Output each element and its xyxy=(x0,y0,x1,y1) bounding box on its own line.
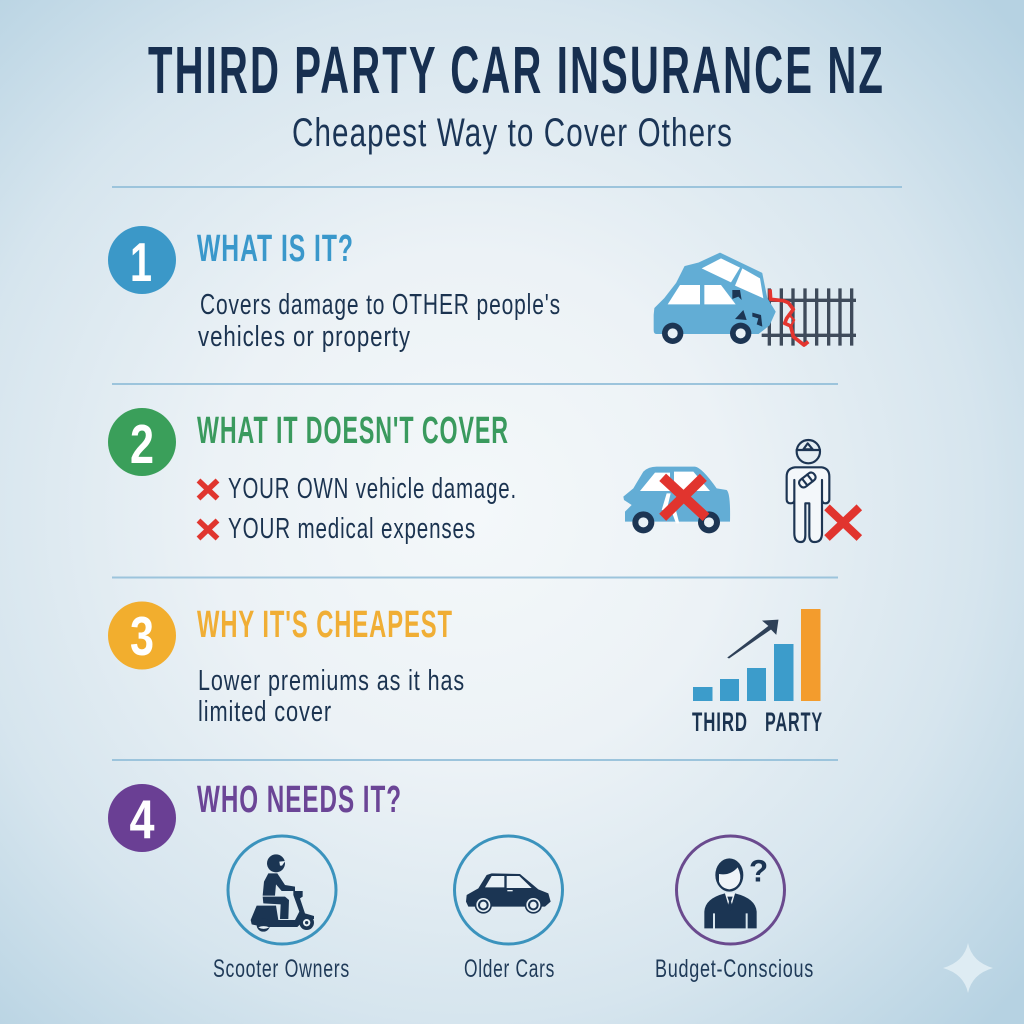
number badge 4 xyxy=(108,784,176,852)
text block: what is it xyxy=(198,289,561,353)
text block: what is it: Covers damage to OTHER people's xyxy=(200,289,561,321)
text block: why it's cheapest xyxy=(198,665,465,728)
list item: medical expenses xyxy=(198,513,476,545)
number badge 3: 3 xyxy=(130,605,154,667)
label: Older Cars xyxy=(464,955,555,983)
list item: own vehicle damage: YOUR OWN vehicle damage. xyxy=(228,473,517,505)
icon: sparkle watermark xyxy=(943,943,993,993)
panel: who needs it xyxy=(108,779,814,983)
text block: why it's cheapest: limited cover xyxy=(198,696,332,728)
icon: scooter owner xyxy=(213,836,350,983)
label: Scooter Owners xyxy=(213,955,350,983)
number badge 2: 2 xyxy=(130,413,154,475)
chart label: PARTY xyxy=(765,707,823,737)
number badge 1: 1 xyxy=(130,231,152,293)
icon: damaged car with cross xyxy=(623,467,730,533)
chart label xyxy=(692,707,823,737)
number badge 2 xyxy=(108,408,176,476)
icon: older car xyxy=(454,836,562,983)
list item: own vehicle damage xyxy=(198,473,517,505)
bar chart: rising premiums xyxy=(692,609,823,737)
text block: what is it: vehicles or property xyxy=(198,321,411,353)
text block: why it's cheapest: Lower premiums as it has xyxy=(198,665,465,697)
icon: budget-conscious person xyxy=(655,836,814,983)
number badge 4: 4 xyxy=(130,788,155,850)
panel: why it's cheapest xyxy=(108,602,823,737)
heading: why it's cheapest: WHY IT'S CHEAPEST xyxy=(197,604,453,646)
heading: what is it: WHAT IS IT? xyxy=(197,228,354,270)
heading: who needs it: WHO NEEDS IT? xyxy=(197,779,402,821)
list item: medical expenses: YOUR medical expenses xyxy=(228,513,476,545)
chart label: THIRD xyxy=(692,707,748,737)
label: Budget-Conscious xyxy=(655,955,814,983)
subtitle: Cheapest Way to Cover Others xyxy=(292,111,733,155)
heading: what it doesn't cover: WHAT IT DOESN'T COVER xyxy=(197,410,509,452)
icon: budget-conscious person: ? xyxy=(749,854,768,889)
number badge 1 xyxy=(108,226,176,294)
panel: what is it xyxy=(108,226,856,353)
icon: injured person with cross xyxy=(787,440,859,542)
number badge 3 xyxy=(108,602,176,670)
arrow: upward trend xyxy=(728,620,778,658)
panel: what it doesn't cover xyxy=(108,408,859,545)
icon: car crashing into fence xyxy=(654,253,856,346)
